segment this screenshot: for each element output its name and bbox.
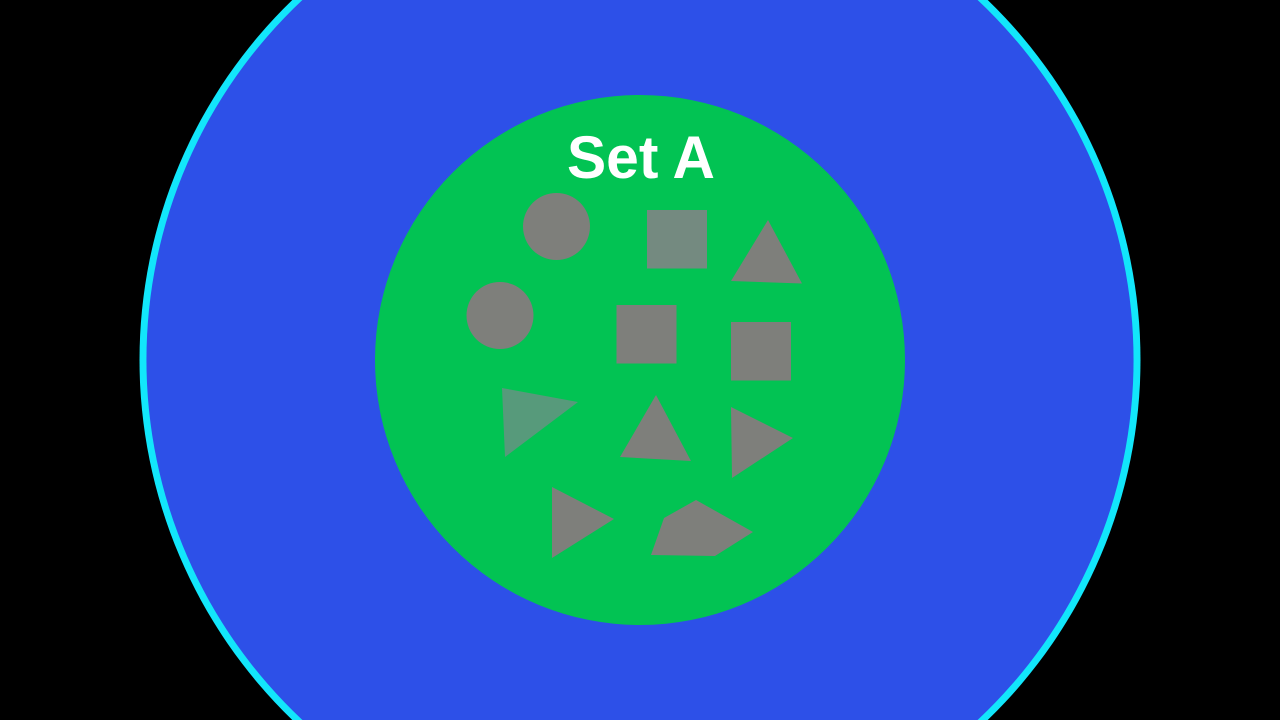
circle 2 <box>466 282 534 349</box>
universal set circle <box>140 0 1140 720</box>
square 3 <box>731 322 791 380</box>
square 1 <box>647 210 707 268</box>
circle 1 <box>523 193 590 260</box>
triangle 3 <box>620 395 691 461</box>
triangle 1 <box>731 220 802 284</box>
square 2 <box>616 305 676 364</box>
shapes group <box>466 193 802 558</box>
set A circle <box>375 95 905 625</box>
triangle 2 <box>502 388 578 457</box>
triangle 5 <box>552 487 614 558</box>
set A label: Set A <box>567 124 715 191</box>
irregular shape <box>651 500 753 556</box>
triangle 4 <box>731 407 793 478</box>
